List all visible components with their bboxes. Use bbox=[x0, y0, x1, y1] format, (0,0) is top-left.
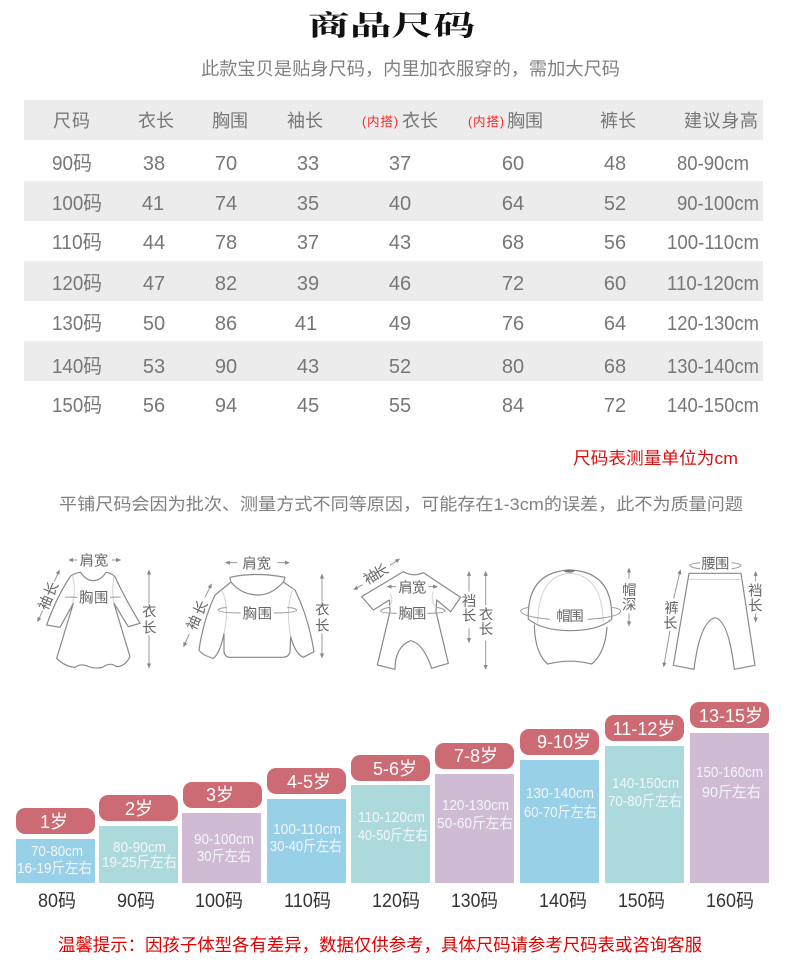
column: 150码: 140-150cm bbox=[612, 775, 679, 792]
column: 140码: 140码 bbox=[539, 891, 587, 912]
column: 140码: 130-140cm bbox=[526, 785, 594, 802]
row 100: 40 bbox=[389, 193, 411, 215]
row 90: 80-90cm bbox=[677, 153, 749, 175]
row 100 bbox=[52, 193, 759, 215]
icon: hoodie: 袖长 bbox=[183, 598, 212, 633]
icon: baby romper: 衣 bbox=[479, 606, 493, 623]
column: 90码: 80-90cm bbox=[113, 839, 166, 856]
column: 90码: 2岁 bbox=[125, 799, 153, 819]
row 140 bbox=[52, 356, 759, 378]
row 130: 41 bbox=[295, 313, 317, 335]
table header: 裤长 bbox=[600, 111, 636, 131]
table header: 胸围 bbox=[507, 111, 543, 131]
row 110: 43 bbox=[389, 232, 411, 254]
icon: baby romper: 长 bbox=[479, 621, 493, 638]
column: 130码: 50-60斤左右 bbox=[437, 815, 513, 832]
subtitle: 此款宝贝是贴身尺码，内里加衣服穿的，需加大尺码 bbox=[201, 59, 620, 79]
column: 80码: 1岁 bbox=[40, 812, 68, 832]
table header bbox=[53, 111, 758, 131]
row 120: 120码 bbox=[52, 273, 102, 295]
row 100: 52 bbox=[604, 193, 626, 215]
row 150: 72 bbox=[604, 395, 626, 417]
row 130: 64 bbox=[604, 313, 626, 335]
icon: pants: 裤 bbox=[664, 600, 679, 617]
row 100: 100码 bbox=[52, 193, 102, 215]
table header: 胸围 bbox=[212, 111, 248, 131]
icon: baby romper: 袖长 bbox=[361, 561, 392, 588]
row 100: 90-100cm bbox=[677, 193, 759, 215]
icon: baby romper bbox=[355, 560, 493, 669]
row 110: 68 bbox=[502, 232, 524, 254]
row 120: 39 bbox=[297, 273, 319, 295]
title: 商品尺码 bbox=[308, 4, 475, 44]
column: 110码: 30-40斤左右 bbox=[270, 838, 342, 855]
column: 130码: 130码 bbox=[451, 891, 498, 912]
icon: hoodie: 肩宽 bbox=[242, 555, 271, 572]
icon: cap: 深 bbox=[622, 596, 637, 613]
bottom reminder: 温馨提示：因孩子体型各有差异，数据仅供参考，具体尺码请参考尺码表或咨询客服 bbox=[58, 935, 702, 955]
row 90 bbox=[52, 153, 749, 175]
column: 100码: 100码 bbox=[195, 891, 243, 912]
row 110 bbox=[52, 232, 759, 254]
row 90: 33 bbox=[297, 153, 319, 175]
table header: 袖长 bbox=[287, 111, 323, 131]
row 100: 35 bbox=[297, 193, 319, 215]
row 150 bbox=[52, 395, 759, 417]
column: 130码 bbox=[435, 743, 514, 912]
column: 160码: 150-160cm bbox=[696, 764, 763, 781]
column: 150码: 70-80斤左右 bbox=[608, 793, 682, 810]
table header: (内搭) bbox=[362, 114, 398, 129]
icon: hoodie: 胸围 bbox=[243, 605, 272, 622]
column: 90码: 19-25斤左右 bbox=[102, 854, 177, 871]
row 110: 110码 bbox=[52, 232, 102, 254]
column: 80码 bbox=[16, 808, 95, 912]
row 130 bbox=[52, 313, 759, 335]
column: 100码 bbox=[182, 782, 262, 912]
row 150: 55 bbox=[389, 395, 411, 417]
row 140: 53 bbox=[143, 356, 165, 378]
row 150: 45 bbox=[297, 395, 319, 417]
row 120: 47 bbox=[143, 273, 165, 295]
row 130: 76 bbox=[502, 313, 524, 335]
row 90: 48 bbox=[604, 153, 626, 175]
icon: pants: 裆 bbox=[748, 583, 763, 600]
column: 110码: 110码 bbox=[284, 891, 331, 912]
row 140: 43 bbox=[297, 356, 319, 378]
row 90: 90码 bbox=[52, 153, 92, 175]
column: 110码: 100-110cm bbox=[273, 821, 341, 838]
row 100: 74 bbox=[215, 193, 237, 215]
column: 150码 bbox=[605, 715, 684, 912]
column: 110码: 4-5岁 bbox=[287, 772, 331, 792]
row 140: 140码 bbox=[52, 356, 102, 378]
column: 120码 bbox=[351, 755, 430, 912]
column: 120码: 40-50斤左右 bbox=[358, 827, 428, 844]
row 140: 52 bbox=[389, 356, 411, 378]
column: 100码: 3岁 bbox=[206, 785, 234, 805]
column: 130码: 120-130cm bbox=[442, 797, 509, 814]
icon: baby romper: 肩宽 bbox=[398, 579, 426, 596]
icon: baby romper: 裆 bbox=[462, 593, 476, 610]
row 120: 60 bbox=[604, 273, 626, 295]
row 120: 82 bbox=[215, 273, 237, 295]
row 130: 49 bbox=[389, 313, 411, 335]
row 130: 120-130cm bbox=[667, 313, 759, 335]
column: 150码: 150码 bbox=[618, 891, 665, 912]
icon: pants bbox=[663, 556, 763, 669]
column: 120码: 5-6岁 bbox=[373, 759, 417, 779]
icon: dress: 衣 bbox=[142, 604, 157, 621]
column: 110码 bbox=[267, 768, 346, 912]
column: 80码: 70-80cm bbox=[31, 843, 83, 860]
row 100: 64 bbox=[502, 193, 524, 215]
age size chart bbox=[16, 702, 769, 912]
table header: 衣长 bbox=[402, 111, 438, 131]
table header: 建议身高 bbox=[684, 111, 758, 131]
column: 80码: 16-19斤左右 bbox=[17, 860, 92, 877]
row 140: 80 bbox=[502, 356, 524, 378]
row 100: 41 bbox=[142, 193, 164, 215]
row 150: 84 bbox=[502, 395, 524, 417]
row 90: 38 bbox=[143, 153, 165, 175]
icon: dress: 肩宽 bbox=[80, 552, 108, 569]
column: 100码: 90-100cm bbox=[194, 831, 254, 848]
row 110: 78 bbox=[215, 232, 237, 254]
column: 90码 bbox=[99, 795, 178, 912]
icon: cap: 帽 bbox=[622, 582, 637, 599]
size table bbox=[24, 100, 763, 417]
column: 140码 bbox=[520, 729, 599, 912]
icon: pants: 长 bbox=[663, 615, 678, 632]
row 150: 94 bbox=[215, 395, 237, 417]
icon: cap bbox=[521, 569, 637, 664]
icon: cap: 帽围 bbox=[556, 608, 584, 625]
icon: pants: 长 bbox=[748, 598, 763, 615]
column: 150码: 11-12岁 bbox=[613, 719, 675, 739]
column: 160码: 160码 bbox=[706, 891, 754, 912]
row 120: 46 bbox=[389, 273, 411, 295]
table header: 衣长 bbox=[138, 111, 174, 131]
icon: dress: 胸围 bbox=[79, 590, 108, 607]
icon: pants: 腰围 bbox=[701, 556, 729, 572]
row 130: 130码 bbox=[52, 313, 102, 335]
row 140: 68 bbox=[604, 356, 626, 378]
row 120: 110-120cm bbox=[667, 273, 759, 295]
column: 100码: 30斤左右 bbox=[197, 848, 251, 865]
column: 160码 bbox=[690, 702, 769, 912]
column: 120码: 110-120cm bbox=[358, 809, 425, 826]
column: 160码: 13-15岁 bbox=[699, 706, 763, 726]
row 110: 37 bbox=[297, 232, 319, 254]
row 120 bbox=[52, 273, 759, 295]
column: 80码: 80码 bbox=[38, 891, 76, 912]
row 130: 50 bbox=[143, 313, 165, 335]
row 130: 86 bbox=[215, 313, 237, 335]
column: 120码: 120码 bbox=[372, 891, 420, 912]
row 150: 56 bbox=[143, 395, 165, 417]
row 90: 37 bbox=[389, 153, 411, 175]
column: 130码: 7-8岁 bbox=[454, 746, 498, 766]
column: 140码: 9-10岁 bbox=[537, 732, 591, 752]
icon: dress: 长 bbox=[142, 620, 157, 637]
row 110: 56 bbox=[604, 232, 626, 254]
row 140: 90 bbox=[215, 356, 237, 378]
icon: hoodie: 长 bbox=[315, 618, 330, 635]
row 150: 150码 bbox=[52, 395, 102, 417]
column: 160码: 90斤左右 bbox=[702, 784, 761, 801]
row 110: 100-110cm bbox=[667, 232, 759, 254]
row 110: 44 bbox=[143, 232, 165, 254]
icon: hoodie bbox=[183, 555, 330, 658]
row 120: 72 bbox=[502, 273, 524, 295]
unit note: 尺码表测量单位为cm bbox=[573, 449, 738, 468]
column: 90码: 90码 bbox=[117, 891, 155, 912]
table header: (内搭) bbox=[468, 114, 504, 129]
icon: baby romper: 胸围 bbox=[398, 605, 426, 622]
row 90: 70 bbox=[215, 153, 237, 175]
measurement disclaimer: 平铺尺码会因为批次、测量方式不同等原因，可能存在1-3cm的误差，此不为质量问题 bbox=[59, 495, 743, 514]
row 90: 60 bbox=[502, 153, 524, 175]
icon: dress: 袖长 bbox=[35, 579, 63, 613]
icon: baby romper: 长 bbox=[462, 608, 476, 625]
column: 140码: 60-70斤左右 bbox=[524, 804, 597, 821]
row 150: 140-150cm bbox=[667, 395, 759, 417]
table header: 尺码 bbox=[53, 111, 90, 131]
icon: dress bbox=[35, 552, 157, 668]
row 140: 130-140cm bbox=[667, 356, 759, 378]
icon: hoodie: 衣 bbox=[315, 602, 330, 619]
